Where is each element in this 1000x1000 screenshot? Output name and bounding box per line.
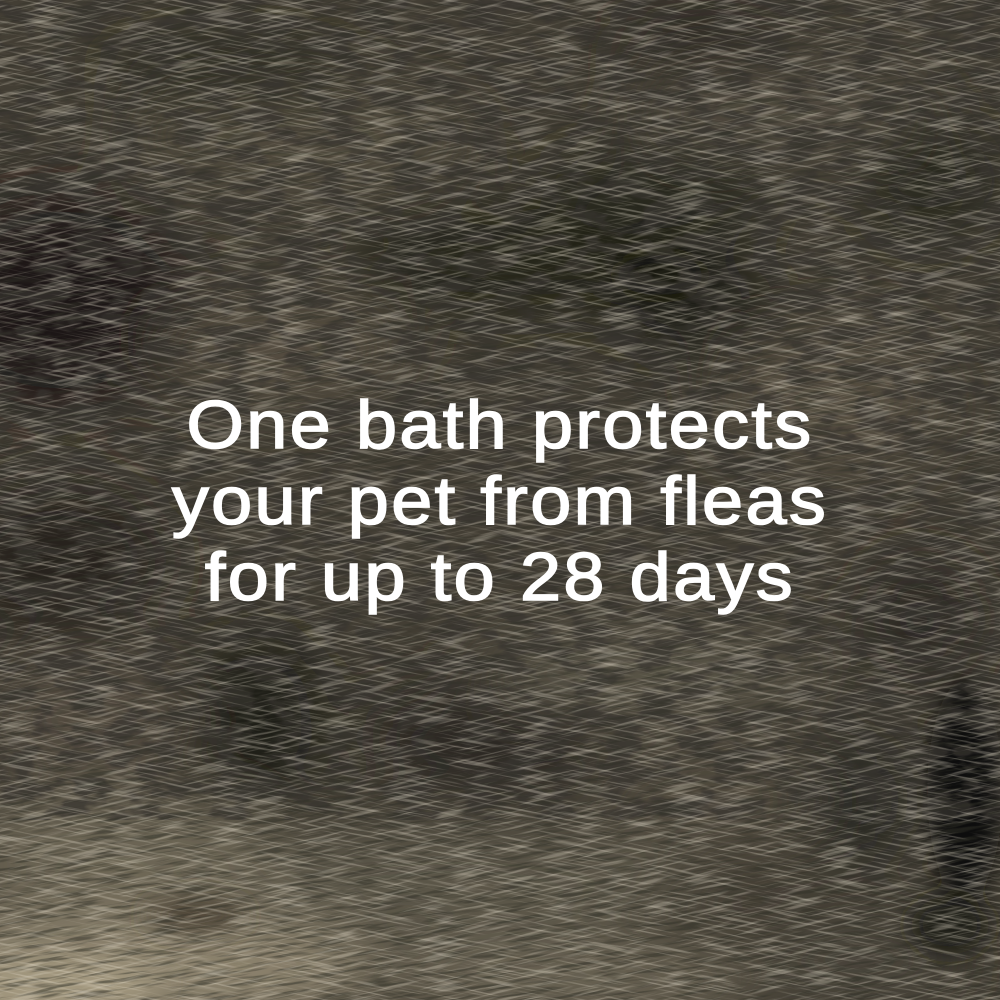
title text: One bath protects — [186, 387, 814, 463]
title text — [170, 387, 828, 615]
title text: for up to 28 days — [205, 539, 795, 615]
darkest and lightest accents — [0, 255, 1000, 1000]
title text: your pet from fleas — [172, 463, 828, 539]
